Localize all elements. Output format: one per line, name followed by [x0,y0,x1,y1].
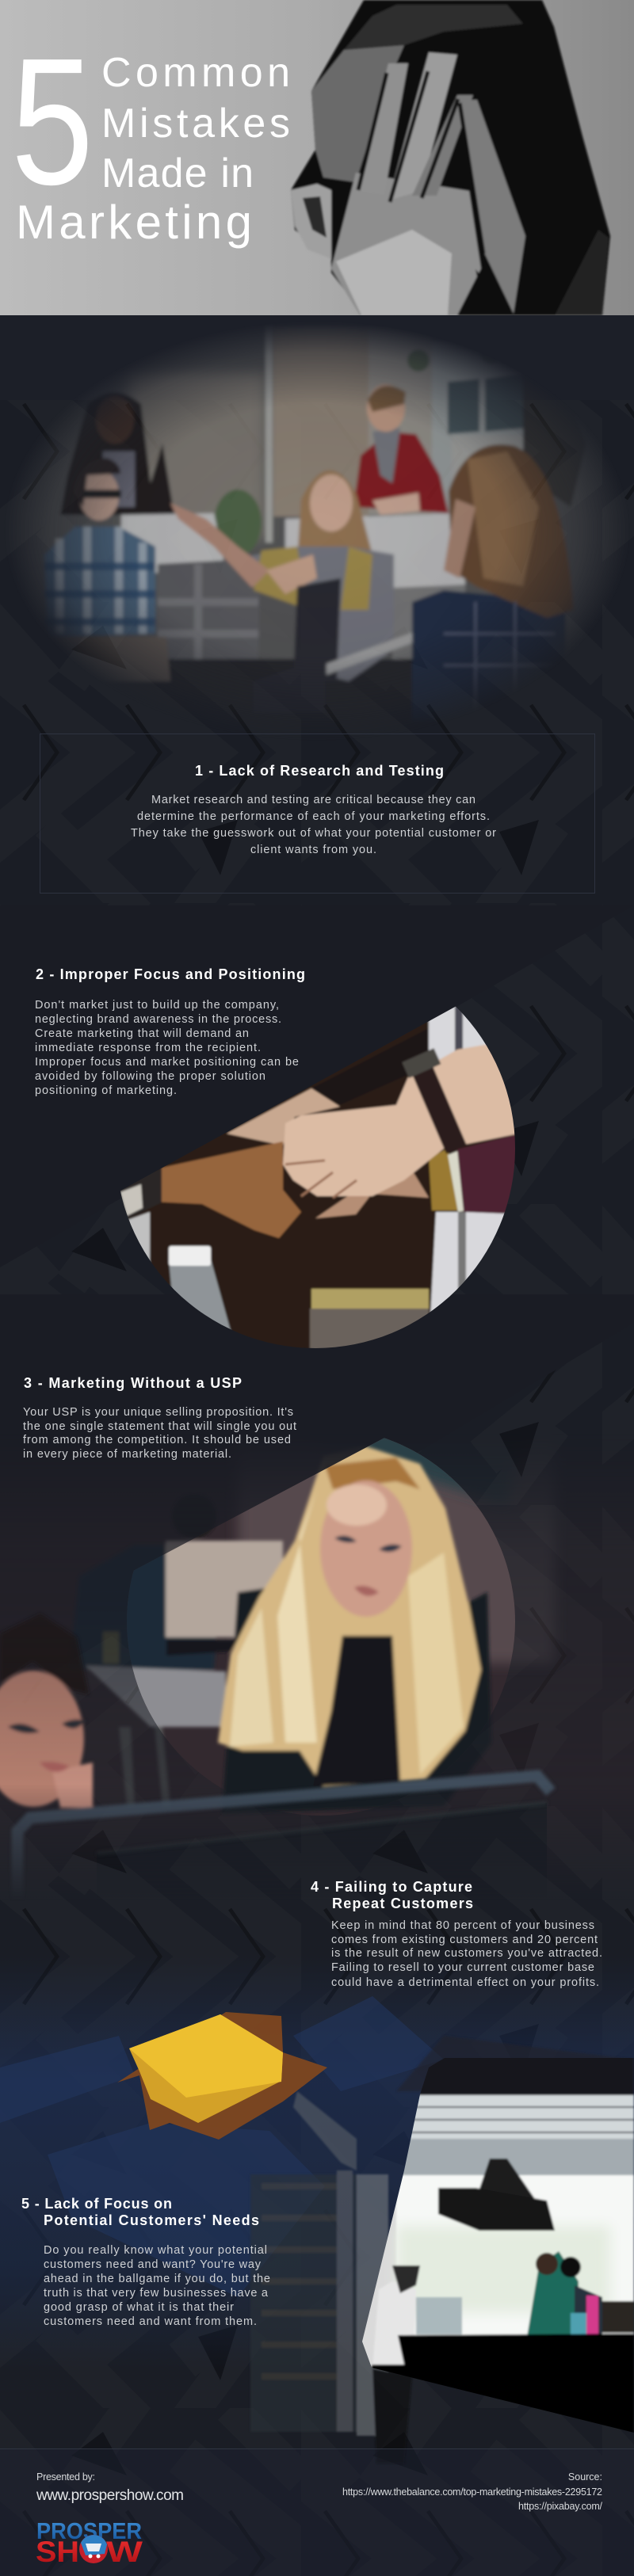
text: sources [342,2471,603,2512]
text: mistake 5 body: good grasp of what it is that their [44,2301,234,2314]
text: mistake 5 body: customers need and want? You're way [44,2258,262,2271]
heading: mistake 2: 2 - Improper Focus and Positioning [36,966,305,982]
text: mistake 2 body: neglecting brand awareness in the process. [35,1013,281,1026]
text: mistake 2 body: positioning of marketing. [35,1084,177,1097]
icon: man holding his head [291,0,610,315]
text: mistake 1 body: client wants from you. [250,844,376,856]
text: mistake 1 body: They take the guesswork out of what your potential customer or [131,827,496,840]
image: woman at computer, dimmed [0,1452,634,1838]
logo: Prosper Show: SH [36,2536,79,2568]
panel: mistake 3 [23,1375,296,1461]
panel: mistake 5 [21,2196,270,2328]
panel: footer [0,2448,634,2576]
text: mistake 2 body: Create marketing that will demand an [35,1027,249,1040]
text: mistake 4 body: is the result of new customers you've attracted. [331,1947,602,1960]
heading: mistake 4: 4 - Failing to Capture [311,1879,472,1895]
text: mistake 3 body: Your USP is your unique selling proposition. It's [23,1406,293,1419]
image: cafe photo, dimmed surroundings [250,2036,634,2464]
text: mistake 5 body: ahead in the ballgame if you do, but the [44,2273,270,2285]
text: mistake 3 body: the one single statement that will single you out [23,1420,296,1433]
image: cafe photo, bright spotlight [357,2052,634,2448]
panel: header [0,0,634,315]
text: mistake 5 body: Do you really know what your potential [44,2244,267,2257]
text: mistake 4 body [331,1919,602,1989]
text: mistake 4 body: comes from existing customers and 20 percent [331,1934,598,1946]
text: mistake 4 body: could have a detrimental effect on your profits. [331,1976,599,1989]
graphic: yellow box [0,1996,444,2297]
heading: mistake 5 [21,2196,259,2228]
text: sources: https://www.thebalance.com/top-marketing-mistakes-2295172 [342,2486,602,2498]
panel: section 1 background [0,315,634,905]
panel: mistake 4 [311,1879,602,1989]
decorative blue polygon wash [0,1957,634,2368]
text: website: www.prospershow.com [36,2487,184,2504]
heading: mistake 3: 3 - Marketing Without a USP [24,1375,242,1391]
image: fist bump photo [120,1006,515,1348]
logo: Prosper Show [36,2519,143,2568]
logo: Prosper Show: W [106,2536,143,2568]
title: Mistakes [101,101,290,147]
text: mistake 3 body: from among the competition. It should be used [23,1434,291,1446]
panel: section 3 background [0,1323,634,2576]
panel: mistake 2 [35,966,523,1364]
text: mistake 1 body: Market research and testing are critical because they can [151,794,476,806]
heading: mistake 4 [311,1879,473,1911]
panel: section 2 background [0,905,634,1556]
text: mistake 5 body: truth is that very few businesses have a [44,2287,269,2300]
title: 5 [11,21,94,223]
title: Made in [101,151,254,196]
text: mistake 2 body: immediate response from the recipient. [35,1042,261,1054]
title: Marketing [16,196,252,249]
text: mistake 1 body: determine the performance of each of your marketing efforts. [137,810,490,823]
text: sources: Source: [568,2471,602,2483]
text: mistake 5 body [44,2244,270,2328]
text: mistake 2 body [35,999,299,1097]
panel: mistake 1 [40,734,594,894]
text: mistake 4 body: Failing to resell to your current customer base [331,1961,594,1974]
heading: mistake 1: 1 - Lack of Research and Testing [195,763,444,779]
text: mistake 3 body [23,1406,296,1461]
title: Common [101,50,290,96]
image: left woman and monitor [0,1614,556,1882]
text: mistake 4 body: Keep in mind that 80 percent of your business [331,1919,594,1932]
logo: Prosper Show: PROSPER [36,2519,142,2544]
text: mistake 2 body: avoided by following the proper solution [35,1070,265,1083]
text: mistake 3 body: in every piece of marketing material. [23,1448,231,1461]
heading: mistake 5: 5 - Lack of Focus on [21,2196,172,2212]
heading: mistake 5: Potential Customers' Needs [44,2212,259,2228]
heading: mistake 4: Repeat Customers [332,1896,473,1911]
text: mistake 2 body: Don't market just to build up the company, [35,999,279,1012]
text: mistake 1 body [131,794,496,856]
text: mistake 5 body: customers need and want from them. [44,2315,257,2328]
text: mistake 2 body: Improper focus and market positioning can be [35,1056,299,1069]
image: meeting photo [21,327,613,711]
text: presented by: Presented by: [36,2471,95,2483]
image: woman at computer, bright circle [127,1438,515,1816]
title [11,21,290,249]
text: sources: https://pixabay.com/ [518,2501,603,2512]
